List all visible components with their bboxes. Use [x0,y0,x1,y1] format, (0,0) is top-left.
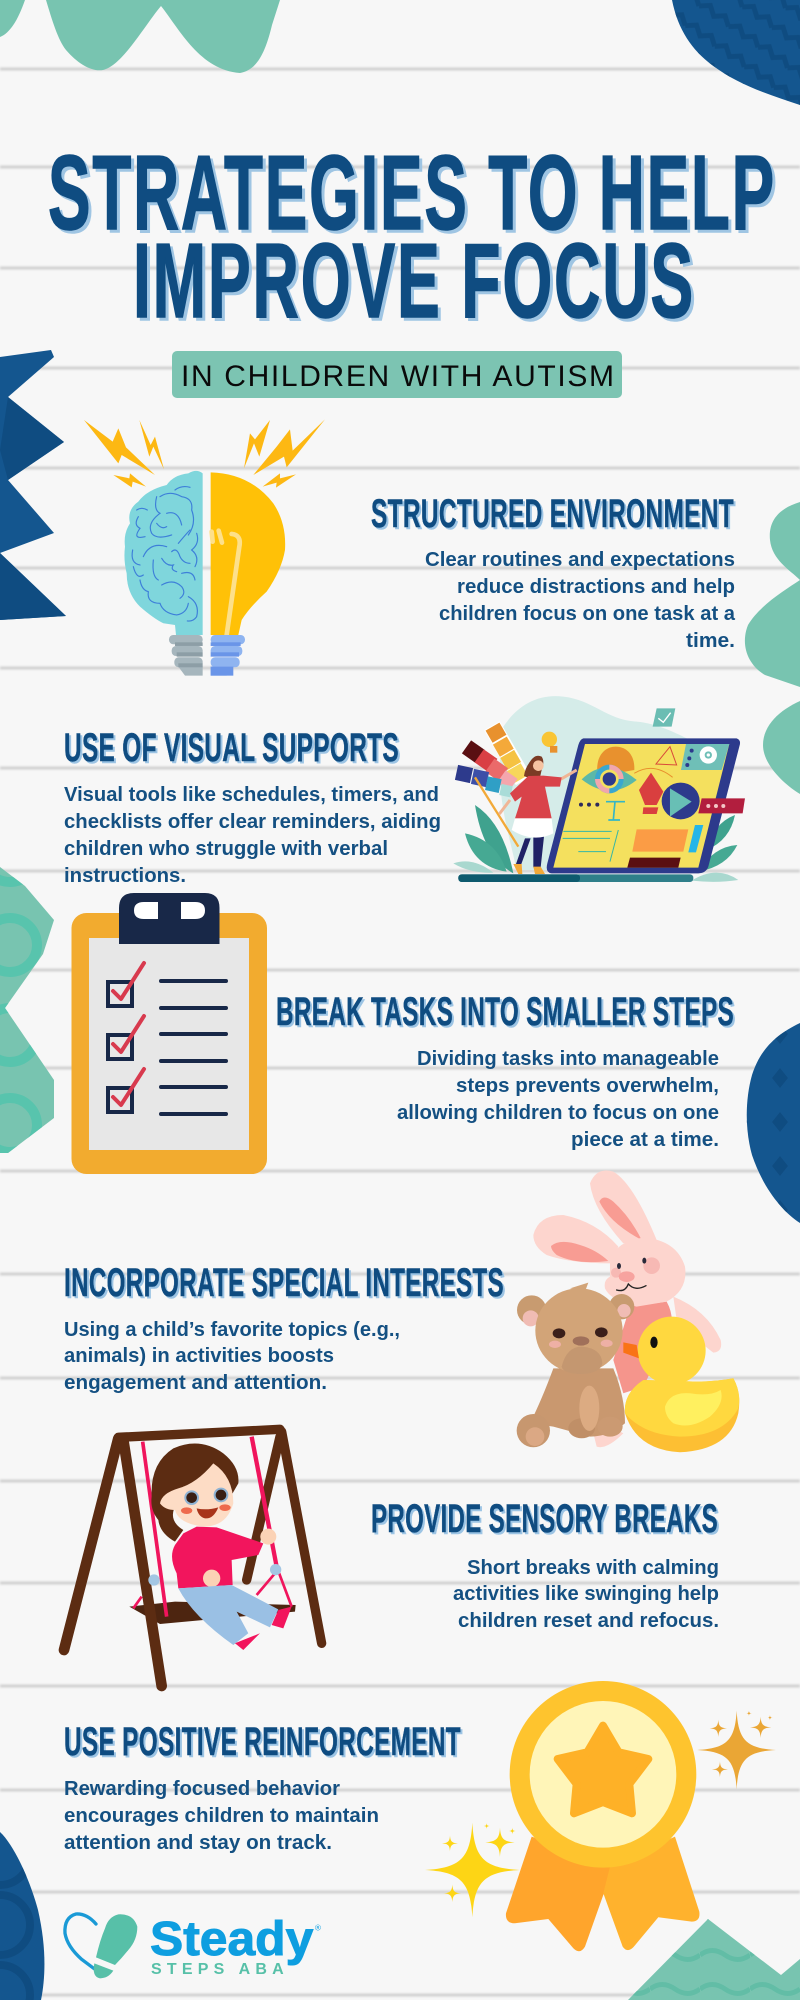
heading: USE POSITIVE REINFORCEMENT [64,1720,461,1764]
description: activities like swinging help [453,1583,719,1605]
description: Using a child’s favorite topics (e.g., [64,1319,400,1341]
section: use of visual supports [64,726,441,887]
description [64,1778,379,1854]
description: Short breaks with calming [467,1557,719,1579]
heading: USE OF VISUAL SUPPORTS [64,726,399,770]
description: Dividing tasks into manageable [417,1048,719,1070]
description: encourages children to maintain [64,1805,379,1827]
decoration: right teal blob upper [745,502,800,687]
description: piece at a time. [571,1129,719,1151]
logo: Steady Steps ABA: Steady [150,1913,314,1966]
description: instructions. [64,865,186,887]
illustration: toy bunny, bear and duck [517,1171,739,1452]
title [48,134,776,340]
woman figure [499,756,577,874]
description [453,1557,719,1632]
bunny [533,1171,721,1447]
decoration: left navy zigzag [0,350,66,620]
description: Visual tools like schedules, timers, and [64,784,439,806]
icon: brain and light bulb [84,419,325,676]
section: use positive reinforcement [64,1720,461,1854]
description: Rewarding focused behavior [64,1778,340,1800]
description: engagement and attention. [64,1372,327,1394]
description: steps prevents overwhelm, [456,1075,719,1097]
description: reduce distractions and help [457,576,735,598]
logo: Steady Steps ABA: STEPS ABA [151,1961,284,1978]
description: Clear routines and expectations [425,549,735,571]
subtitle badge [172,351,622,398]
bear [517,1283,634,1447]
description: allowing children to focus on one [397,1102,719,1124]
icon: gold sparkles [697,1711,776,1789]
icon: gold medal with ribbons [506,1681,699,1951]
decoration: bottom right teal mountains [628,1919,800,2000]
section: structured environment [371,492,736,652]
logo: Steady Steps ABA: ® [315,1924,321,1933]
decoration: right navy blob [747,1023,800,1223]
logo mark [65,1914,137,1978]
description: checklists offer clear reminders, aiding [64,811,441,833]
decoration: bottom left navy blob [0,1832,44,2000]
girl [151,1444,292,1650]
description [425,549,736,652]
decoration: right teal blob lower [763,701,800,794]
description [397,1048,719,1151]
decoration: top right navy blob [672,0,800,105]
logo: Steady Steps ABA [65,1913,321,1978]
description: children who struggle with verbal [64,838,388,860]
icon: yellow sparkles [425,1823,520,1917]
section: provide sensory breaks [371,1497,719,1632]
illustration: designer with tablet [453,696,745,882]
decoration: top teal blobs [0,0,280,73]
swing frame back [64,1429,322,1650]
decoration: left teal blob [0,867,54,1153]
duck [623,1317,739,1452]
description: children focus on one task at a [439,603,736,625]
description: time. [686,630,735,652]
section: break tasks into smaller steps [276,990,734,1151]
description: animals) in activities boosts [64,1345,334,1367]
subtitle badge: IN CHILDREN WITH AUTISM [181,360,614,393]
icon: clipboard checklist [72,893,267,1174]
section: incorporate special interests [64,1261,504,1394]
description: children reset and refocus. [458,1610,719,1632]
illustration: girl on swing [64,1429,322,1686]
description [64,784,441,887]
description [64,1319,400,1394]
description: attention and stay on track. [64,1832,332,1854]
heading: INCORPORATE SPECIAL INTERESTS [64,1261,504,1305]
